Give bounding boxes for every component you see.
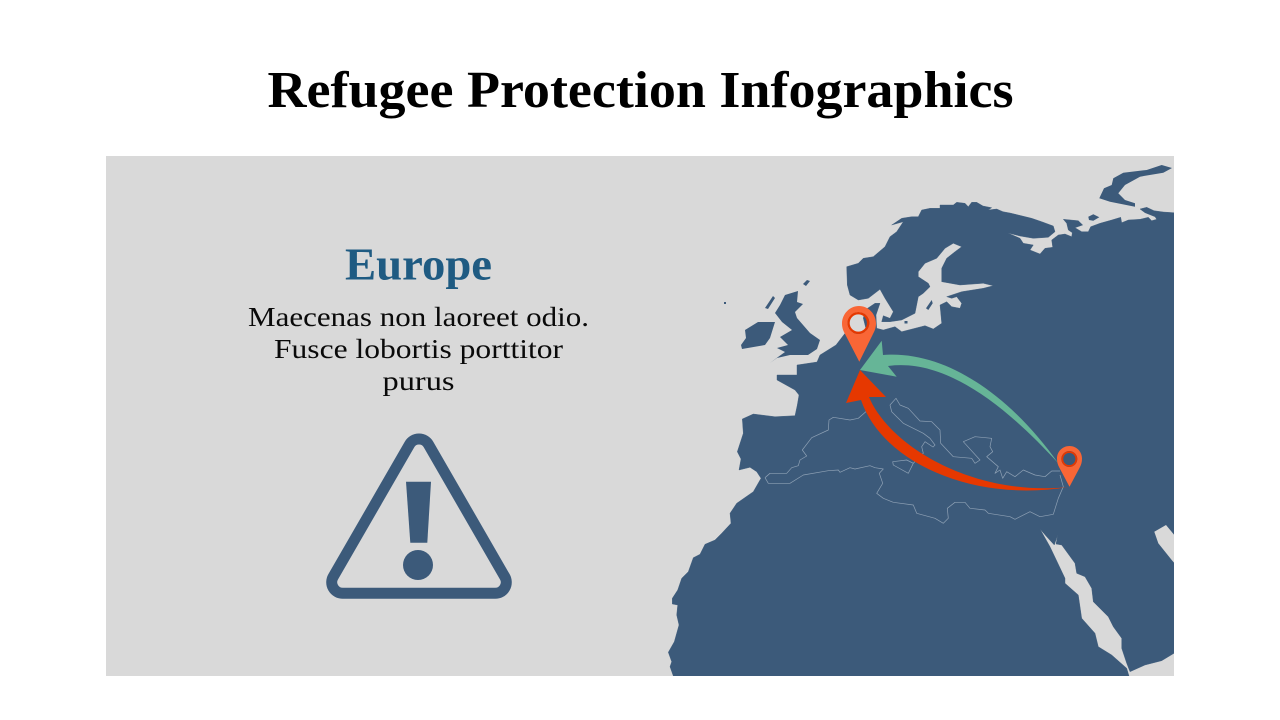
icon: warning triangle (332, 439, 506, 593)
gulf: Persian Gulf (1154, 525, 1174, 562)
text block: description: purus (382, 366, 454, 396)
map landmass (668, 202, 1174, 676)
island: Kolguev (1088, 214, 1099, 221)
island: Novaya Zemlya (1099, 165, 1172, 207)
heading: Europe: Europe (345, 240, 492, 290)
icon: destination pin (842, 306, 876, 362)
title: Refugee Protection Infographics (268, 62, 1014, 119)
text block: description (248, 302, 589, 396)
coast lines: Mediterranean (765, 398, 1063, 523)
islands: small northern islands (724, 280, 933, 324)
icon: origin pin (1057, 446, 1082, 487)
arrow: red route (846, 370, 1069, 490)
text block: description: Maecenas non laoreet odio. (248, 302, 589, 332)
island: Ireland (741, 322, 775, 349)
panel: Europe (106, 156, 1176, 676)
text block: description: Fusce lobortis porttitor (274, 334, 563, 364)
arrow: green route (860, 341, 1058, 463)
island: Great Britain (770, 291, 820, 363)
map: Europe, North Africa and Middle East (668, 165, 1176, 676)
